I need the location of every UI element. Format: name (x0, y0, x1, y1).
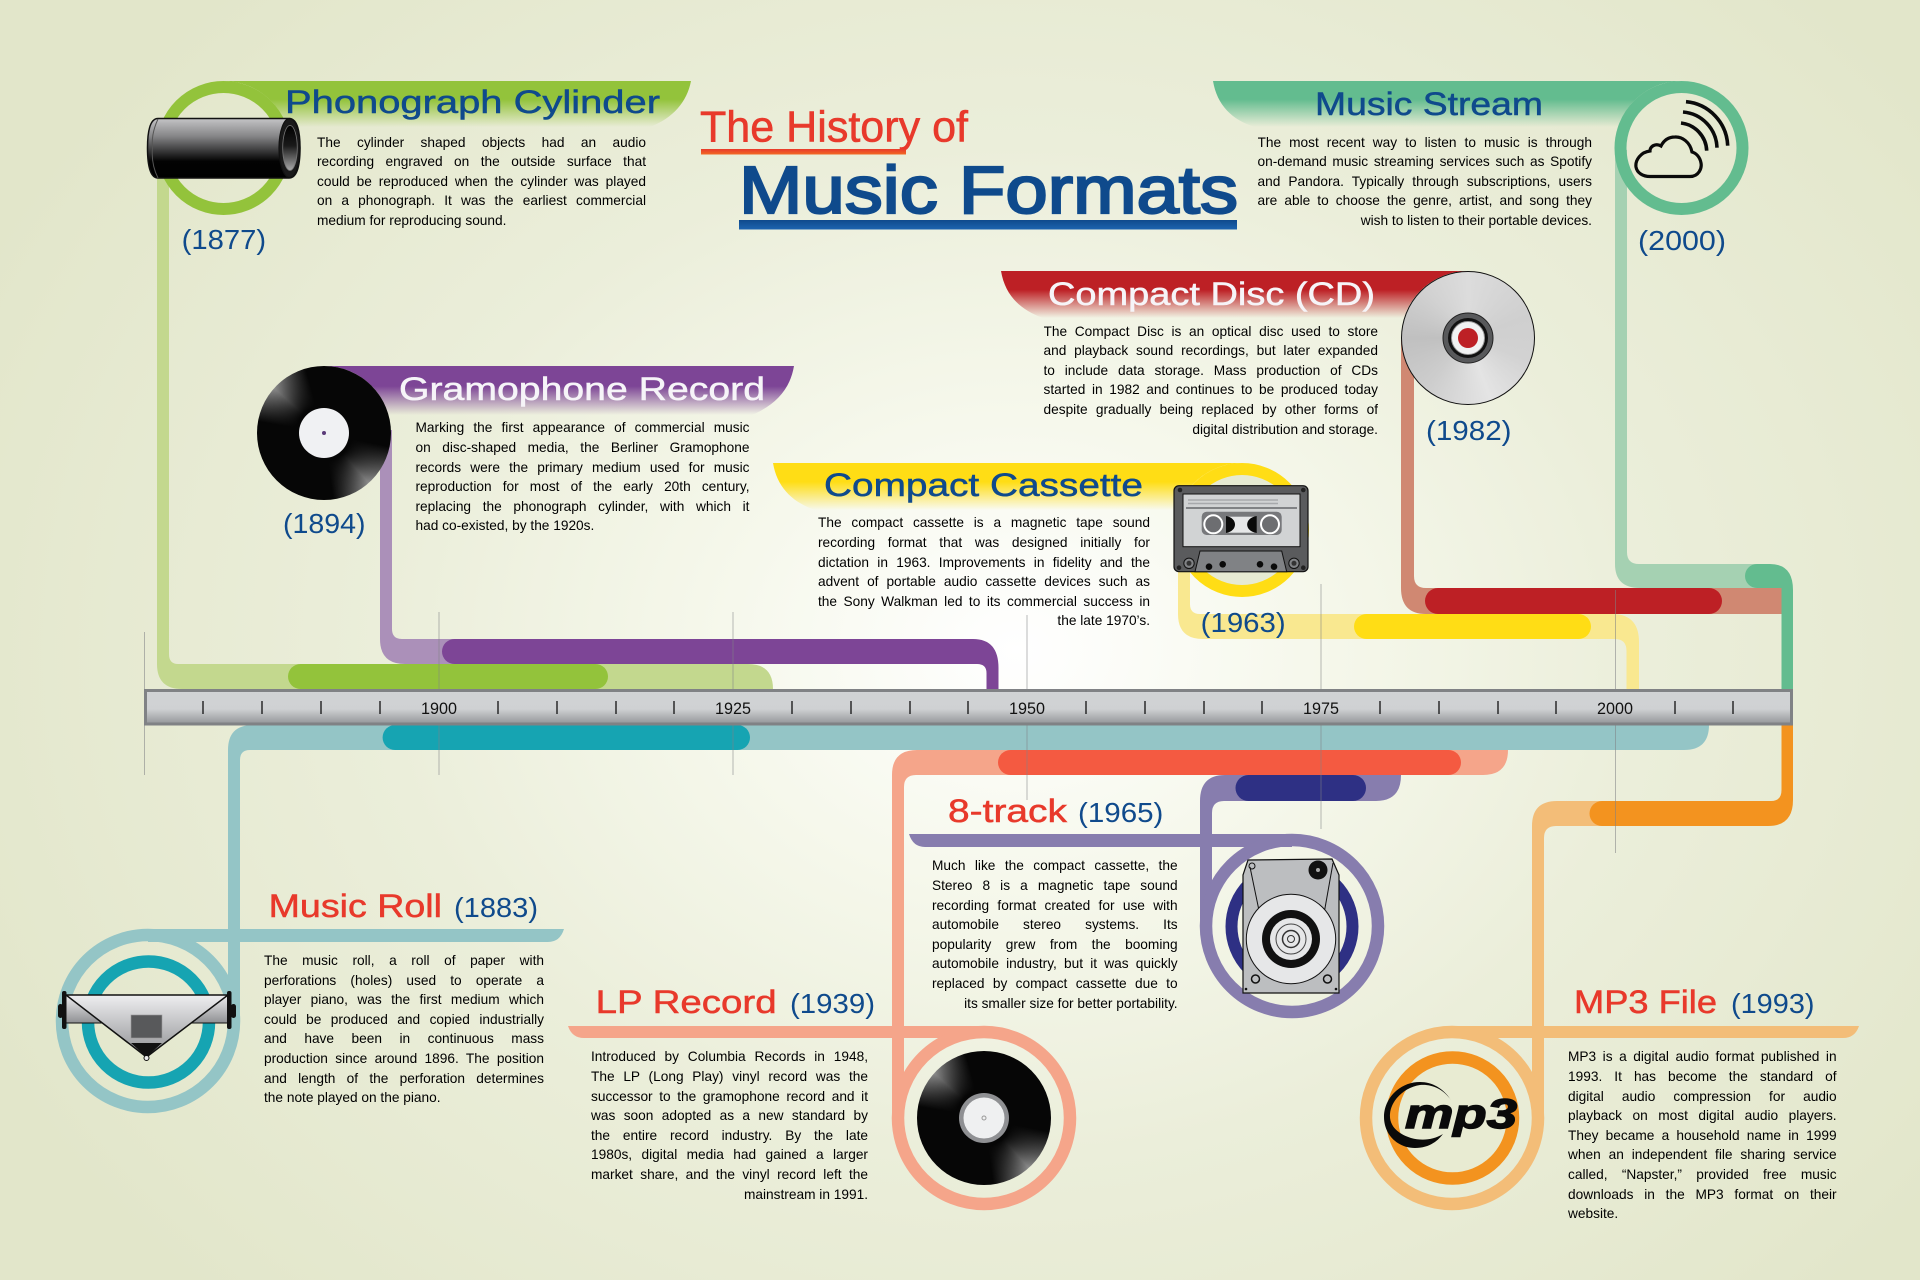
icon: cloud and signal (1636, 102, 1728, 176)
text block: on-demand music streaming services such as Spotify (1258, 154, 1592, 169)
connector: music stream lifespan (1615, 150, 1793, 689)
text block: despite gradually being replaced by other forms of (1044, 402, 1378, 417)
title (700, 102, 1238, 230)
icon: vinyl record (257, 366, 391, 500)
heading: Music Stream (1315, 86, 1543, 122)
icon: 8-track cartridge (1243, 859, 1339, 993)
text block: started in 1982 and continues to be produced today (1044, 382, 1378, 397)
inner ring (88, 962, 209, 1082)
year: (1877) (182, 224, 266, 255)
text block (591, 1047, 868, 1207)
header bar (1452, 1026, 1859, 1038)
connector: gramophone record lifespan (380, 430, 998, 689)
text block: records were the primary medium used for music (416, 460, 750, 475)
connector: compact disc lifespan (1401, 340, 1782, 614)
panel: phonograph cylinder (148, 81, 691, 255)
panel: music roll (58, 888, 564, 1111)
connector: LP record lifespan (892, 750, 1508, 1118)
text block: Much like the compact cassette, the (932, 858, 1178, 873)
text block: The compact cassette is a magnetic tape sound (818, 515, 1150, 530)
text block: Introduced by Columbia Records in 1948, (591, 1049, 868, 1064)
panel: compact cassette (773, 463, 1308, 638)
text block: digital distribution and storage. (1192, 422, 1378, 437)
text block: and length of the perforation determines (264, 1071, 544, 1086)
ring (1181, 469, 1303, 591)
header band (1213, 81, 1682, 127)
timeline bar: 1950 (1009, 699, 1045, 718)
text block: and playback sound recordings, but later expanded (1044, 343, 1378, 358)
text block: market share, and the vinyl record left the (591, 1167, 868, 1182)
ring (898, 1032, 1070, 1204)
text block: The LP (Long Play) vinyl record was the (591, 1069, 868, 1084)
text block: on disc-shaped media, the Berliner Gramophone (416, 440, 750, 455)
icon: vinyl record (917, 1051, 1051, 1185)
text block: automobile stereo systems. Its (932, 917, 1178, 932)
panel: LP record (568, 984, 1070, 1207)
year: (1894) (283, 508, 366, 539)
icon: piano roll (58, 991, 236, 1060)
connector: phonograph cylinder lifespan (157, 150, 773, 689)
heading: MP3 File (1574, 984, 1717, 1020)
text block: to include data storage. Mass production of CDs (1044, 363, 1378, 378)
text block (932, 856, 1178, 1016)
text block: called, “Napster,” provided free music (1568, 1167, 1837, 1182)
text block (818, 513, 1150, 633)
icon: cassette (1174, 486, 1308, 572)
heading: LP Record (596, 984, 777, 1020)
text block: The most recent way to listen to music is through (1258, 135, 1592, 150)
text block: successor to the gramophone record and it (591, 1089, 868, 1104)
text block (416, 418, 750, 538)
text block: website. (1568, 1206, 1618, 1221)
panel: gramophone record (257, 366, 794, 539)
header band (1001, 271, 1468, 318)
ring (1620, 87, 1742, 209)
timeline bar (146, 690, 1792, 724)
title: The History of (700, 102, 969, 152)
text block: automobile industry, but it was quickly (932, 956, 1178, 971)
text block (264, 951, 544, 1111)
year: (1993) (1731, 988, 1814, 1019)
header bar (148, 929, 564, 942)
text block: could be reproduced when the cylinder was played (317, 174, 646, 189)
text block: and Pandora. Typically through subscriptions, users (1258, 174, 1592, 189)
panel: music stream (1213, 81, 1742, 256)
text block: downloads in the MP3 format on their (1568, 1187, 1837, 1202)
panel: compact disc (1001, 271, 1535, 446)
text block: digital audio compression for audio (1568, 1089, 1837, 1104)
header bar (568, 1026, 984, 1038)
text block: recording format created for use with (932, 898, 1178, 913)
timeline bar: 1925 (715, 699, 751, 718)
text block: The cylinder shaped objects had an audio (317, 135, 646, 150)
text block: 1980s, digital media had gained a larger (591, 1147, 868, 1162)
inner ring (1392, 1058, 1513, 1178)
icon: compact disc (1401, 271, 1535, 405)
header band (324, 366, 794, 415)
text block: They became a household name in 1999 (1568, 1128, 1837, 1143)
text block: recording engraved on the outside surface that (317, 154, 646, 169)
text block: on a phonograph. It was the earliest commercial (317, 193, 646, 208)
heading: Phonograph Cylinder (285, 84, 660, 120)
text block: production since around 1896. The position (264, 1051, 544, 1066)
heading: Gramophone Record (399, 371, 765, 407)
text block: playback on most digital audio players. (1568, 1108, 1837, 1123)
header band (224, 81, 691, 127)
timeline bar: 2000 (1597, 699, 1633, 718)
heading: Music Roll (269, 888, 442, 924)
text block: wish to listen to their portable devices. (1361, 213, 1592, 228)
panel: MP3 file (1366, 984, 1859, 1227)
header bar (909, 834, 1292, 847)
text block: the note played on the piano. (264, 1090, 441, 1105)
text block: dictation in 1963. Improvements in fidelity and the (818, 555, 1150, 570)
text block: advent of portable audio cassette devices such as (818, 574, 1150, 589)
text block: had co-existed, by the 1920s. (416, 518, 594, 533)
heading: Compact Disc (CD) (1048, 276, 1375, 312)
text block (317, 133, 646, 233)
text block: player piano, was the first medium which (264, 992, 544, 1007)
text block: the entire record industry. By the late (591, 1128, 868, 1143)
outer ring (62, 935, 234, 1107)
text block: was soon adopted as a new standard by (591, 1108, 868, 1123)
timeline bar: 1975 (1303, 699, 1339, 718)
year: (2000) (1638, 225, 1726, 256)
year: (1982) (1426, 415, 1512, 446)
text block: when an independent file sharing service (1568, 1147, 1837, 1162)
text block: The music roll, a roll of paper with (264, 953, 544, 968)
icon: mp3 logo: mp3 (1405, 1090, 1517, 1137)
text block: its smaller size for better portability. (964, 996, 1178, 1011)
text block: reproduction for most of the early 20th century, (416, 479, 750, 494)
title: Music Formats (739, 153, 1238, 228)
text block: and have been in continuous mass (264, 1031, 544, 1046)
text block: Stereo 8 is a magnetic tape sound (932, 878, 1178, 893)
connectors: format lifespan bands (157, 150, 1793, 1118)
text block: perforations (holes) used to operate a (264, 973, 544, 988)
outer ring (1206, 840, 1378, 1012)
heading: Compact Cassette (824, 467, 1143, 503)
timeline bar: 1900 (421, 699, 457, 718)
text block: mainstream in 1991. (744, 1187, 868, 1202)
text block: popularity grew from the booming (932, 937, 1178, 952)
connector: music roll lifespan (228, 725, 1709, 1021)
outer ring (1366, 1032, 1538, 1204)
icon: cylinder (148, 118, 300, 178)
text block: medium for reproducing sound. (317, 213, 506, 228)
text block: the late 1970’s. (1057, 613, 1150, 628)
year: (1965) (1078, 797, 1163, 828)
year: (1939) (790, 988, 875, 1019)
year: (1883) (454, 892, 538, 923)
text block: the Sony Walkman led to its commercial success in (818, 594, 1150, 609)
panel: 8-track (909, 793, 1378, 1016)
header band (773, 463, 1242, 510)
text block: replacing the phonograph cylinder, with which it (416, 499, 750, 514)
inner ring (1232, 866, 1352, 987)
text block (1568, 1047, 1837, 1227)
text block: recording format that was designed initially for (818, 535, 1150, 550)
text block: Marking the first appearance of commercial music (416, 420, 750, 435)
text block: MP3 is a digital audio format published in (1568, 1049, 1837, 1064)
text block: are able to choose the genre, artist, and song they (1258, 193, 1592, 208)
connector: compact cassette lifespan (1178, 530, 1639, 689)
connector: 8-track lifespan (1200, 775, 1401, 926)
icon: mp3 logo (1384, 1082, 1517, 1148)
ring (162, 87, 284, 209)
text block: 1993. It has become the standard of (1568, 1069, 1837, 1084)
year: (1963) (1201, 607, 1286, 638)
text block: replaced by compact cassette due to (932, 976, 1178, 991)
heading: 8-track (948, 793, 1068, 829)
connector: MP3 lifespan (1532, 725, 1793, 1118)
text block: The Compact Disc is an optical disc used to store (1044, 324, 1378, 339)
text block: could be produced and copied industrially (264, 1012, 544, 1027)
text block (1044, 322, 1378, 442)
text block (1258, 133, 1592, 233)
